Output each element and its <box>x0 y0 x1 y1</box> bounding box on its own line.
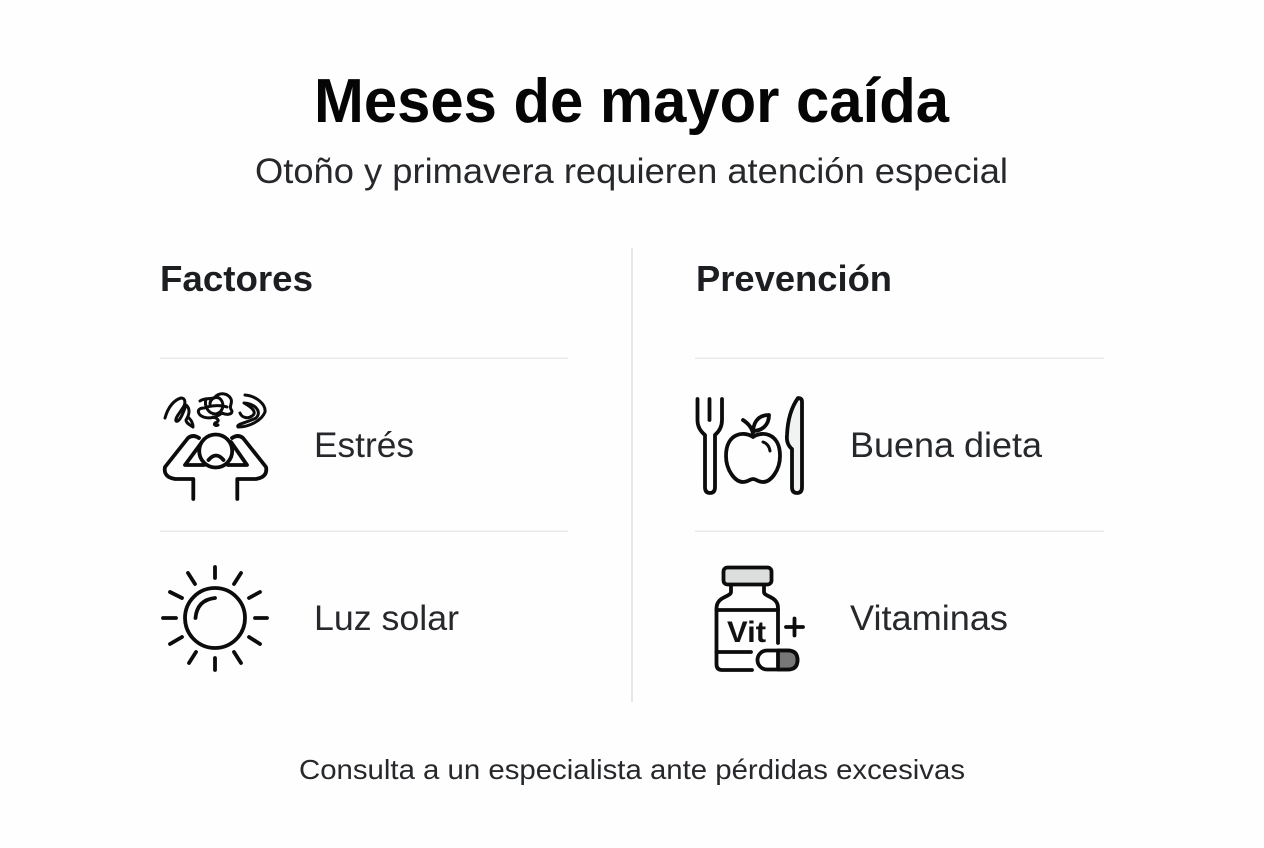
icon: sun <box>163 567 267 670</box>
icon: stress <box>165 394 266 499</box>
heading: Factores: Factores <box>160 258 313 299</box>
label: Vitaminas: Vitaminas <box>850 599 1008 638</box>
footer note: Consulta a un especialista ante pérdidas excesivas <box>299 754 965 785</box>
title: Meses de mayor caída <box>314 67 949 136</box>
label: Luz solar: Luz solar <box>314 599 459 638</box>
label: Estrés: Estrés <box>314 426 414 465</box>
label: Buena dieta: Buena dieta <box>850 426 1043 465</box>
label: Vit: Vit <box>727 616 766 649</box>
icon: cutlery and apple <box>698 398 802 493</box>
subtitle: Otoño y primavera requieren atención especial <box>255 152 1008 191</box>
icon: vitamins <box>716 568 803 670</box>
heading: Prevención: Prevención <box>696 258 892 299</box>
